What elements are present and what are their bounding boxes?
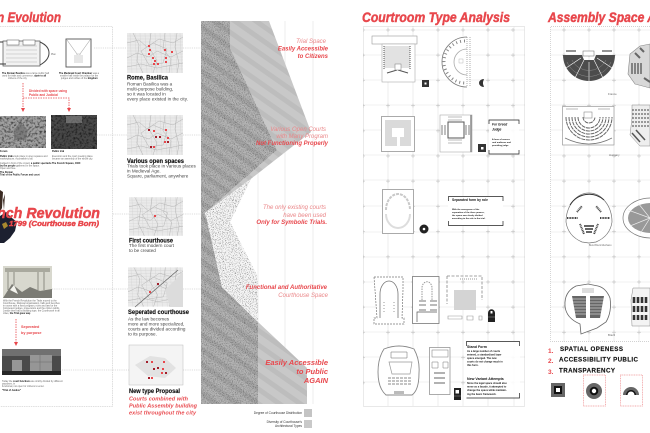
plan: courtroom 10: [430, 348, 450, 394]
caption: modern courthouse: "Trial of Justice": [2, 389, 21, 392]
text: rome basilica: so it was located in: [127, 92, 166, 96]
caption: tribunal: Competent judges, prosecutors and the citizen public.: [3, 307, 60, 310]
annotation: various open courts: [256, 127, 329, 147]
map: rome basilica: [127, 33, 183, 73]
annotation: functional: Functional and Authoritative: [246, 285, 328, 291]
caption: crowd: became an assembly of the whole city.: [52, 158, 93, 160]
callout: separated form by role: separation of the three powers,: [452, 211, 485, 214]
caption: public: by the people gathered in the space.: [0, 164, 40, 168]
callout: stand form and variants: Stand Form: [467, 345, 487, 349]
legend: Degree of Courthouse Distribution: [254, 411, 302, 415]
caption: basilica: [2, 72, 49, 80]
title: courtroom type analysis: Courtroom Type Analysis: [362, 9, 510, 25]
annotation: trial space: Trial Space: [296, 39, 327, 45]
callout: stand form and variants: change the space while maintain-: [467, 389, 507, 392]
label: france: France: [608, 92, 617, 96]
callout: stand form and variants: [466, 341, 520, 398]
caption: modern courthouse: [2, 380, 63, 392]
arrow: divided branch: [21, 83, 71, 112]
callout: for greed judge: For Greed: [492, 122, 507, 126]
plan: assembly stripes right: [630, 105, 650, 146]
annotation: easily accessible again: AGAIN: [303, 376, 329, 385]
caption: public: Trial of the Public Forum and court: [0, 174, 40, 176]
legend: Architectural Types: [275, 424, 302, 428]
photo: revolutionary tribunal: [3, 266, 52, 298]
caption: public: Open and free.: [0, 167, 16, 170]
annotation: existing courts: Only for Symbolic Trials.: [256, 220, 327, 226]
icon: spatial openness square: [551, 383, 565, 397]
label: separated: Seperated: [21, 325, 40, 329]
plan: france assembly: [563, 51, 615, 82]
text: various open spaces: [127, 158, 196, 178]
text: seperated courthouse: more and more specialized,: [128, 322, 184, 326]
callout: stand form and variants: move as a facade, it attempted to: [467, 386, 507, 388]
callout: for greed judge: A form of convex: [492, 138, 511, 141]
callout: stand form and variants: Since the legal space should also: [467, 382, 507, 385]
caption: basilica: The Roman Basilica was a large public hall: [2, 72, 49, 75]
photo: trial crowd: [51, 115, 97, 149]
annotation: existing courts: [256, 205, 327, 226]
heading: french revolution: nch Revolution: [0, 206, 100, 222]
annotation: existing courts: have been used: [283, 213, 327, 219]
plan: courtroom 9: [378, 346, 419, 395]
callout: for greed judge: [489, 120, 519, 154]
caption: hall: smaller hall inside the palace for the: [60, 74, 99, 78]
caption: basilica: citizens of the city: [8, 77, 28, 80]
photo: modern courthouse: [2, 349, 61, 375]
caption: hall: judges and nobles of the kingdom: [60, 77, 98, 80]
list: assembly qualities: 3.: [548, 369, 554, 376]
chart: courthouse distribution grid: [258, 21, 313, 404]
text: rome basilica: Roman Basilica was a: [127, 82, 173, 86]
caption: crowd: Execution and the court meeting place: [52, 155, 93, 158]
label: bund: Bund Brent Mechano: [589, 244, 612, 247]
caption: public: marketplaces. Accessible to all.: [0, 158, 34, 160]
text: new type proposal: Public Assembly building: [129, 404, 198, 410]
annotation: various open courts: Not Functioning Properly: [256, 141, 329, 147]
icon: accessibility circle: [584, 375, 606, 406]
icon: half disc: [479, 79, 484, 87]
caption: public: [0, 150, 52, 176]
callout: for greed judge: Judge: [492, 128, 502, 132]
icon: square type 2: [478, 144, 486, 152]
plan: courtroom 2: [442, 37, 470, 87]
caption: crowd: Public trial: [52, 150, 65, 153]
plan: courtroom 5: [382, 190, 414, 234]
text: rome basilica: [127, 74, 188, 102]
caption: modern courthouse: functional, not open for citizens to enter.: [2, 385, 45, 388]
heading: 1799: 1799 (Courthouse Born): [9, 221, 100, 228]
text: rome basilica: every place existed in the city.: [127, 96, 188, 102]
callout: for greed judge: roof audience and: [492, 142, 512, 144]
caption: tribunal: [3, 300, 61, 315]
caption: public: Public trials took place in open squares and: [0, 155, 48, 158]
plan: hall assembly top right: [628, 44, 650, 88]
text: first courthouse: The first modern court: [129, 243, 175, 248]
text: various open spaces: Trials took place in various places: [127, 164, 196, 168]
annotation: trial space: to Citizens: [298, 54, 329, 60]
annotation: various open courts: Various Open Courts: [270, 127, 326, 133]
annotation: easily accessible again: [265, 358, 329, 385]
callout: separated form by role: the space was clearly divided: [452, 214, 483, 217]
image: revolution soldier: [0, 190, 17, 243]
text: various open spaces: Square, parliament, anywhere: [127, 174, 189, 178]
legend: [254, 409, 312, 428]
annotation: easily accessible again: to Public: [296, 367, 329, 376]
list: assembly qualities: [548, 346, 639, 376]
map: seperated courthouse: [128, 267, 183, 307]
text: new type proposal: New type Proposal: [129, 388, 180, 395]
caption: hall: The Medieval Court Chamber was a: [59, 72, 100, 75]
plan: shield assembly: [565, 284, 610, 334]
caption: hall: [59, 72, 100, 80]
text: first courthouse: to be created: [129, 248, 156, 253]
callout: separated form by role: Separated form by role: [452, 198, 488, 202]
caption: tribunal: With the French Revolution the Trials moved to the: [3, 300, 57, 302]
callout: stand form and variants: As a large number of courts: [467, 350, 501, 353]
caption: public: Forum: [0, 150, 7, 153]
callout: separated form by role: [448, 196, 503, 226]
icon: keyhole square: [454, 388, 461, 400]
plan: radial ellipse: [623, 198, 650, 238]
text: new type proposal: Courts combined with: [129, 396, 189, 402]
label: divided: Public and Judicial: [29, 93, 58, 97]
callout: for greed judge: providing judge: [492, 145, 509, 147]
map: new type proposal: [129, 345, 183, 385]
list: assembly qualities: TRANSPARENCY: [559, 368, 616, 374]
plan: courtroom 8: [447, 276, 482, 320]
annotation: functional: Courthouse Space: [278, 293, 329, 299]
caption: modern courthouse: purposes, in: [2, 382, 16, 386]
caption: public: The Roman: [0, 171, 14, 174]
text: first courthouse: First courthouse: [129, 238, 173, 244]
list: assembly qualities: 1.: [548, 348, 554, 355]
caption: tribunal: in rooms with a fixed program, rules and law for the: [3, 304, 58, 308]
caption: tribunal: Courthouse. Rational organisation, halls and benches: [3, 302, 61, 305]
label: separated: by purpose: [21, 331, 41, 335]
text: seperated courthouse: Seperated courthouse: [128, 309, 190, 316]
caption: modern courthouse: Today the court functions are strictly divided by different: [2, 380, 63, 383]
connectors: [52, 48, 268, 370]
map: various open spaces: [127, 115, 183, 155]
text: seperated courthouse: to its purpose.: [128, 332, 157, 336]
caption: tribunal: Justice then had a building type, the Courthouse in all: [3, 310, 60, 312]
callout: stand form and variants: space emerged. The new: [467, 357, 497, 360]
panel: assembly grid: [550, 26, 650, 342]
label: divided: Divided with space using: [29, 89, 67, 93]
list: assembly qualities: ACCESSIBILITY PUBLIC: [559, 356, 639, 364]
arrow: separated by purpose: [14, 319, 18, 346]
list: assembly qualities: 2.: [548, 358, 554, 365]
label: separated: [21, 325, 41, 335]
plan: courtroom 1: [372, 36, 417, 82]
text: seperated courthouse: courts are divided according: [128, 326, 186, 332]
caption: crowd: [52, 150, 93, 165]
annotation: easily accessible again: Easily Accessible: [265, 358, 328, 367]
callout: separated form by role: With the emergence of the: [452, 208, 480, 211]
legend: Diversity of Courthouse's: [267, 420, 302, 424]
chart: distribution and diversity area: [201, 21, 311, 404]
plan: hungary assembly: [562, 106, 614, 145]
plan: round assembly: [566, 193, 612, 243]
caption: public: Judged in front of the crowd, a public spectacle: [0, 162, 52, 165]
label: hungary: Hungary: [609, 153, 620, 157]
plan: block assembly: [631, 288, 650, 326]
callout: stand form and variants: entered, a standardized layer: [467, 354, 501, 356]
callout: separated form by role: according to the role in the trial.: [452, 217, 486, 220]
annotation: trial space: [278, 39, 329, 60]
callout: stand form and variants: courts do not change much in: [467, 360, 503, 364]
plan: basilica: [0, 40, 56, 66]
plan: courtroom 7: [412, 276, 439, 324]
label: brazil: Brazil: [608, 333, 615, 337]
plan: courtroom 4: [440, 115, 472, 152]
plan: basilica: Plan: [51, 53, 56, 56]
panel: evolution frame: [0, 26, 112, 406]
text: various open spaces: Various open spaces: [127, 158, 185, 165]
callout: stand form and variants: this form.: [467, 364, 479, 367]
text: seperated courthouse: As the law becomes: [128, 316, 170, 322]
callout: stand form and variants: ing the basic framework.: [467, 393, 497, 396]
icon: keyhole: [488, 309, 495, 322]
icon: transparency half ring: [620, 375, 642, 406]
text: new type proposal: [129, 388, 198, 416]
caption: basilica: used for trials and commerce, open to all: [2, 74, 46, 78]
annotation: existing courts: The only existing courts: [263, 205, 326, 211]
caption: tribunal: cities, the Trial gave way.: [3, 312, 31, 315]
photo: public space: [0, 116, 46, 148]
icon: square type 1: [422, 80, 429, 87]
map: first courthouse: [129, 197, 183, 236]
text: first courthouse: [129, 238, 175, 253]
annotation: trial space: Easily Accessible: [278, 46, 329, 52]
plan: hall: [66, 39, 91, 67]
text: rome basilica: multi-purpose building,: [127, 86, 173, 92]
plan: courtroom 6: [374, 277, 404, 324]
text: seperated courthouse: [128, 309, 190, 336]
icon: concentric circle: [420, 224, 428, 234]
text: rome basilica: Rome, Basilica: [127, 74, 169, 82]
annotation: various open courts: with Many Program: [276, 134, 328, 140]
text: various open spaces: in Medieval Age.: [127, 168, 161, 174]
callout: stand form and variants: New Variant Attempts: [467, 377, 504, 381]
text: new type proposal: exist throughout the city: [129, 410, 197, 416]
label: divided: [29, 89, 67, 97]
panel: courtroom grid: [363, 26, 525, 406]
list: assembly qualities: SPATIAL OPENESS: [560, 346, 623, 353]
annotation: functional: [246, 285, 329, 299]
caption: crowd: The French Square, 1600: [52, 162, 81, 165]
plan: courtroom 3: [382, 116, 414, 152]
